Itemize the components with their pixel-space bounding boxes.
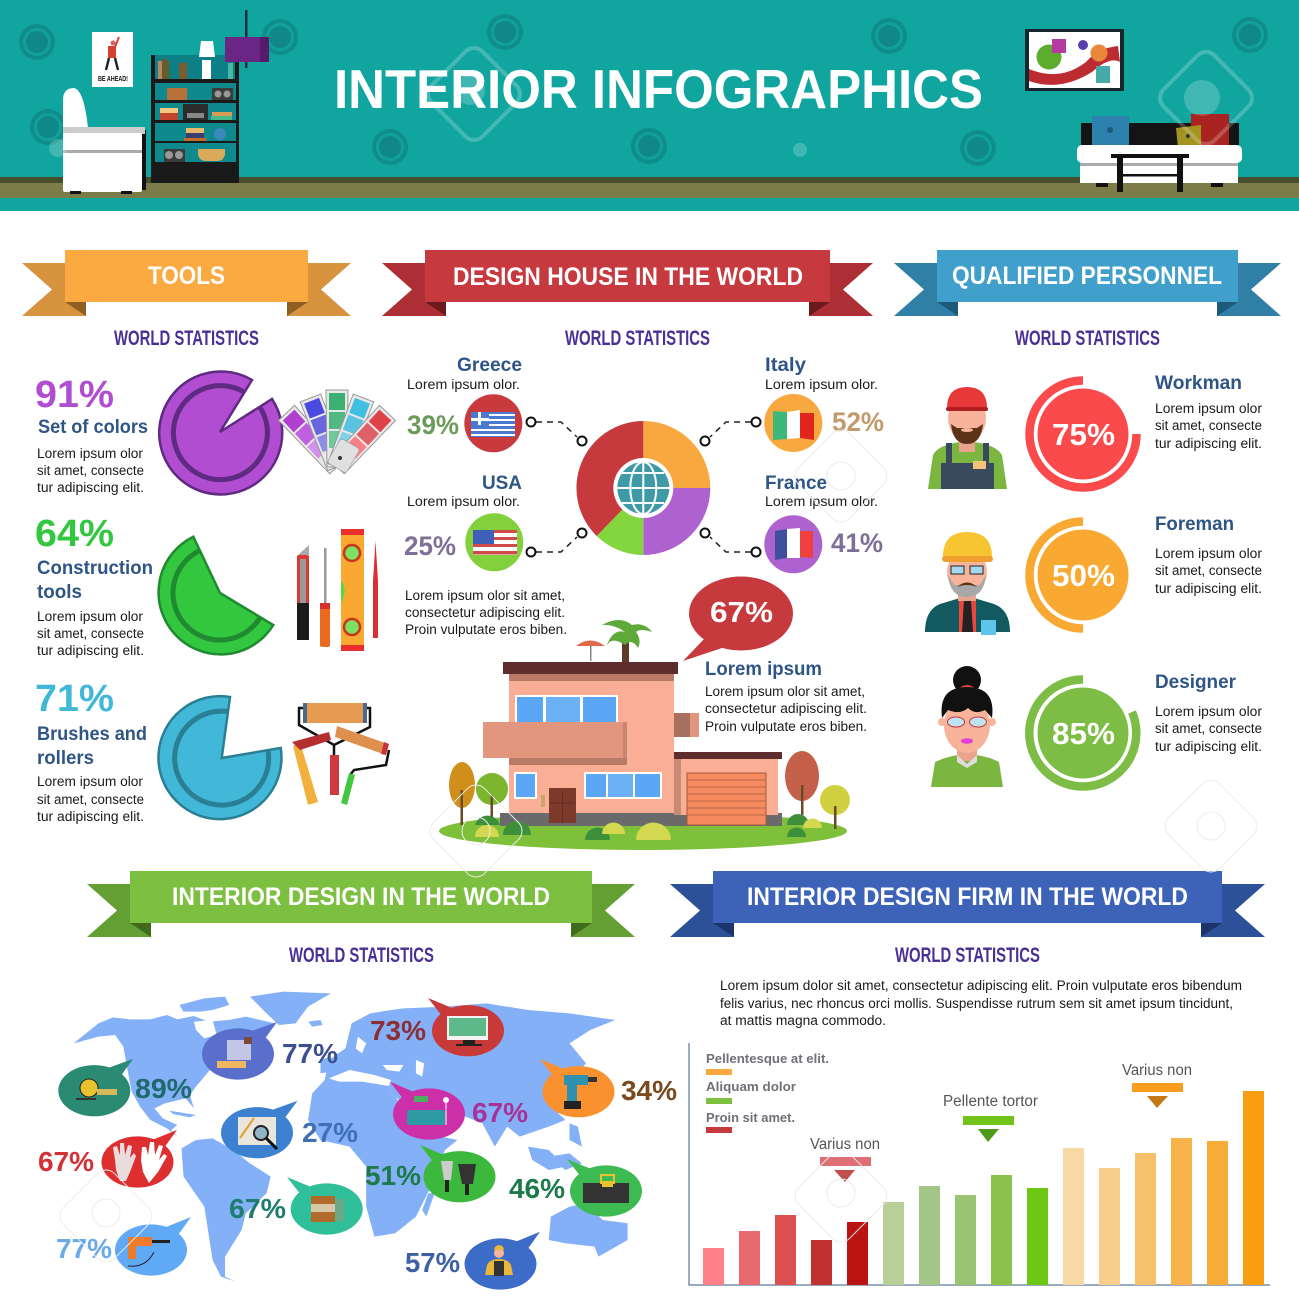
bubble: 77% drill: [56, 1217, 191, 1276]
text block: firm description: at mattis magna commodo.: [720, 1013, 886, 1028]
country: Italy: [764, 355, 884, 452]
bubble: 77% north america: [202, 1022, 338, 1080]
subheading: WORLD STATISTICS: [1015, 327, 1160, 350]
country: France: France: [765, 473, 827, 494]
text block: workman: sit amet, consecte: [1155, 418, 1262, 433]
chart: central pie with globe: [576, 421, 710, 555]
person: designer: [931, 666, 1003, 787]
text block: designer: sit amet, consecte: [1155, 721, 1262, 736]
subheading: WORLD STATISTICS: [289, 944, 434, 967]
legend: [706, 1051, 829, 1133]
bubble: 57%: [405, 1232, 540, 1290]
text block: lorem ipsum: Proin vulputate eros biben.: [705, 719, 867, 734]
stat: brushes and rollers: 71%: [35, 678, 114, 720]
person: workman: [928, 387, 1007, 489]
legend: Aliquam dolor: [706, 1079, 796, 1094]
pie: 91%: [159, 371, 282, 494]
stat: set of colors: sit amet, consecte: [37, 463, 144, 478]
ribbon: tools: TOOLS: [148, 262, 225, 290]
stat: set of colors: [35, 374, 148, 495]
ring: 50%: [1030, 522, 1128, 628]
stat: set of colors: Lorem ipsum olor: [37, 446, 144, 461]
country: Greece: 39%: [407, 410, 459, 440]
bubble: 34%: 34%: [621, 1075, 677, 1106]
text block: firm description: [720, 978, 1242, 1028]
bubble: 67% gloves: [38, 1130, 177, 1188]
text block: designer: Designer: [1155, 672, 1237, 693]
illustration: poster: BE AHEAD!: [98, 76, 128, 83]
bubble: 27%: [221, 1101, 358, 1158]
panel: design house in the world: [382, 250, 884, 850]
stat: set of colors: Set of colors: [38, 417, 148, 438]
country: Italy: 52%: [832, 407, 884, 437]
text block: workman: Lorem ipsum olor: [1155, 401, 1263, 416]
panel: interior design firm in the world: [670, 871, 1270, 1285]
country: France: [764, 473, 883, 573]
panel: qualified personnel: [894, 250, 1281, 787]
person: foreman: [925, 532, 1010, 635]
ring: 75%: 75%: [1052, 417, 1115, 452]
bubble: 67% india: [390, 1082, 528, 1140]
illustration: pendant lamp: [225, 10, 269, 68]
legend: Pellentesque at elit.: [706, 1051, 829, 1066]
connectors: [526, 418, 760, 556]
country: USA: 25%: [404, 531, 456, 561]
subheading: WORLD STATISTICS: [895, 944, 1040, 967]
illustration: framed art: [1025, 29, 1124, 91]
stat: construction tools: Construction: [37, 558, 153, 579]
ring: 50%: 50%: [1052, 558, 1115, 593]
text block: design house description: Lorem ipsum olor sit amet,: [405, 588, 565, 603]
annotation: pellente tortor: [943, 1093, 1038, 1142]
annotation: varius non red: Varius non: [810, 1136, 880, 1153]
text block: lorem ipsum: Lorem ipsum: [705, 659, 822, 680]
ribbon: qualified personnel: QUALIFIED PERSONNEL: [952, 262, 1222, 290]
header banner: [0, 0, 1299, 211]
illustration: house: [439, 620, 850, 850]
icon: construction tools: [297, 529, 378, 651]
bubble: 67% africa: [229, 1177, 363, 1235]
subheading: WORLD STATISTICS: [114, 327, 259, 350]
callout: 67%: [683, 576, 793, 661]
text block: designer: Lorem ipsum olor: [1155, 704, 1263, 719]
text block: designer: tur adipiscing elit.: [1155, 739, 1262, 754]
title: INTERIOR INFOGRAPHICS: [334, 58, 983, 120]
country: Italy: Italy: [765, 355, 806, 376]
text block: workman: [1155, 373, 1263, 451]
bubble: 77% drill: 77%: [56, 1233, 112, 1264]
legend: Proin sit amet.: [706, 1110, 795, 1125]
bubble: 27%: 27%: [302, 1117, 358, 1148]
country: Italy: Lorem ipsum olor.: [765, 377, 878, 392]
ribbon: interior design: [87, 871, 635, 937]
bubble: 51%: 51%: [365, 1160, 421, 1191]
bubble: 67% africa: 67%: [229, 1193, 286, 1224]
stat: brushes and rollers: tur adipiscing elit.: [37, 809, 144, 824]
illustration: armchair: [63, 88, 146, 194]
stat: brushes and rollers: Lorem ipsum olor: [37, 774, 144, 789]
ribbon: design firm: INTERIOR DESIGN FIRM IN THE WORLD: [747, 883, 1188, 911]
country: USA: USA: [482, 473, 522, 494]
stat: construction tools: tur adipiscing elit.: [37, 643, 144, 658]
stat: brushes and rollers: [35, 678, 147, 824]
text block: foreman: tur adipiscing elit.: [1155, 581, 1262, 596]
subheading: WORLD STATISTICS: [565, 327, 710, 350]
ribbon: design house: [382, 250, 873, 316]
country: Greece: Greece: [457, 355, 522, 376]
bubble: 73%: [370, 998, 504, 1056]
ribbon: design house: DESIGN HOUSE IN THE WORLD: [453, 263, 803, 291]
bar chart: [689, 1043, 1270, 1285]
stat: construction tools: 64%: [35, 513, 114, 555]
pie: 64%: [159, 537, 273, 654]
bubble: 67% gloves: 67%: [38, 1146, 94, 1177]
pie: 71%: [158, 696, 281, 819]
stat: brushes and rollers: rollers: [37, 748, 94, 769]
ribbon: interior design: INTERIOR DESIGN IN THE WORLD: [172, 883, 550, 911]
text block: lorem ipsum: consectetur adipiscing elit.: [705, 701, 867, 716]
annotation: varius non red: [810, 1136, 880, 1182]
stat: brushes and rollers: sit amet, consecte: [37, 792, 144, 807]
stat: construction tools: Lorem ipsum olor: [37, 609, 144, 624]
text block: lorem ipsum: [705, 659, 867, 734]
stat: construction tools: sit amet, consecte: [37, 626, 144, 641]
text block: foreman: sit amet, consecte: [1155, 563, 1262, 578]
stat: brushes and rollers: Brushes and: [37, 724, 147, 745]
country: France: 41%: [831, 528, 883, 558]
country: Greece: [407, 355, 522, 452]
text block: design house description: consectetur adipiscing elit.: [405, 605, 565, 620]
bubble: 67% india: 67%: [472, 1097, 528, 1128]
annotation: varius non orange: [1122, 1062, 1192, 1108]
text block: workman: Workman: [1155, 373, 1242, 394]
panel: interior design in the world: [38, 871, 677, 1290]
bubble: 89%: 89%: [135, 1073, 192, 1104]
stat: set of colors: 91%: [35, 374, 114, 416]
bubble: 34%: [540, 1059, 677, 1117]
illustration: poster: [92, 32, 133, 87]
country: France: Lorem ipsum olor.: [765, 494, 878, 509]
country: USA: [404, 473, 523, 571]
icon: brushes and rollers: [292, 703, 389, 805]
ring: 85%: [1029, 679, 1136, 786]
panel: tools: [22, 250, 396, 824]
stat: construction tools: [35, 513, 153, 658]
bubble: 73%: 73%: [370, 1015, 426, 1046]
ring: 85%: 85%: [1052, 716, 1115, 751]
bubble: 46%: [509, 1159, 642, 1217]
world map: [74, 992, 628, 1282]
ribbon: design firm: [670, 871, 1265, 937]
stat: set of colors: tur adipiscing elit.: [37, 480, 144, 495]
illustration: bookshelf: [151, 41, 239, 183]
text block: foreman: Foreman: [1155, 514, 1234, 535]
text block: design house description: Proin vulputate eros biben.: [405, 622, 567, 637]
text block: designer: [1155, 672, 1263, 754]
bubble: 89%: [58, 1059, 192, 1116]
country: Greece: Lorem ipsum olor.: [407, 377, 520, 392]
ribbon: tools: [22, 250, 351, 316]
country: USA: Lorem ipsum olor.: [407, 494, 520, 509]
bubble: 77% north america: 77%: [282, 1038, 338, 1069]
text block: workman: tur adipiscing elit.: [1155, 436, 1262, 451]
stat: construction tools: tools: [37, 582, 82, 603]
text block: design house description: [405, 588, 567, 637]
illustration: sofa and table: [1077, 114, 1242, 192]
callout: 67%: 67%: [710, 597, 773, 629]
text block: foreman: Lorem ipsum olor: [1155, 546, 1263, 561]
text block: firm description: Lorem ipsum dolor sit amet, consectetur adipiscing elit. Proin vulputate eros bibendum: [720, 978, 1242, 993]
text block: firm description: felis varius, nec rhoncus orci mollis. Suspendisse rutrum sem sit amet ipsum tincidunt,: [720, 996, 1233, 1011]
ring: 75%: [1030, 380, 1136, 487]
icon: color swatch fan: [278, 390, 396, 475]
text block: foreman: [1155, 514, 1263, 596]
annotation: varius non orange: Varius non: [1122, 1062, 1192, 1079]
bubble: 57%: 57%: [405, 1247, 460, 1278]
bubble: 46%: 46%: [509, 1173, 565, 1204]
annotation: pellente tortor: Pellente tortor: [943, 1093, 1038, 1110]
text block: lorem ipsum: Lorem ipsum olor sit amet,: [705, 684, 865, 699]
bubble: 51%: [365, 1145, 496, 1202]
ribbon: qualified personnel: [894, 250, 1281, 316]
